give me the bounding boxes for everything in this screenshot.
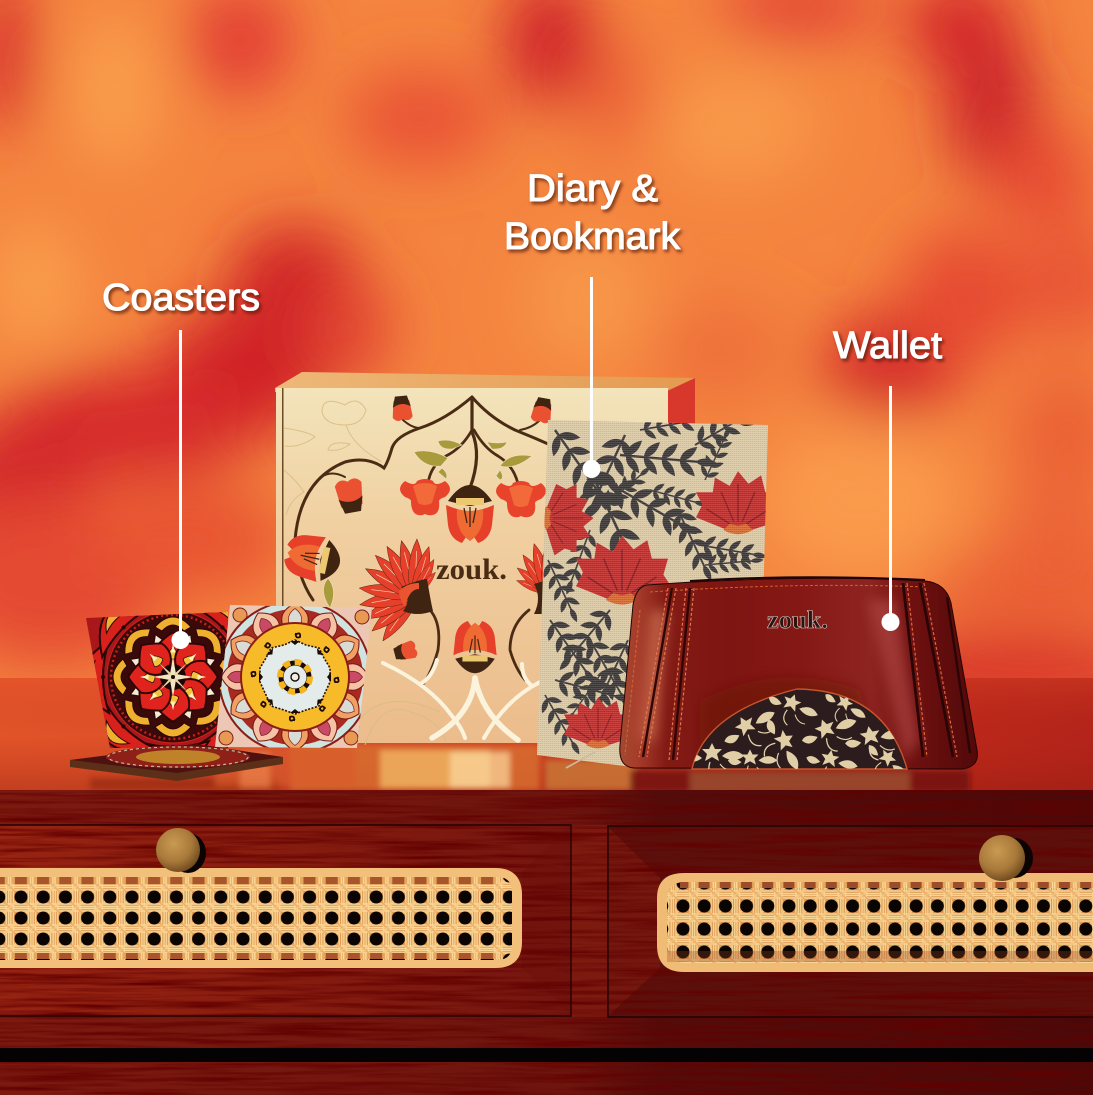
leader line and dot: Diary bbox=[582, 277, 600, 478]
coaster corner motifs bbox=[219, 608, 369, 745]
label: Diary & Bookmark: Diary & bbox=[527, 168, 658, 210]
right drawer knob bbox=[979, 835, 1033, 881]
zipper pull bbox=[566, 752, 595, 768]
faint botanical print bbox=[284, 401, 560, 745]
gift box bbox=[275, 372, 695, 745]
top right blossom bbox=[496, 481, 546, 517]
leaf sprigs on cover bbox=[542, 422, 764, 754]
large spray flower bbox=[359, 539, 439, 645]
callout: Coasters bbox=[102, 277, 260, 649]
wallet: red leather with floral panel bbox=[620, 577, 977, 791]
olive leaves bbox=[323, 440, 532, 608]
box inner crease bbox=[282, 388, 284, 628]
red flower, bottom bbox=[564, 698, 622, 748]
wallet seams bbox=[625, 583, 970, 760]
red flower, centre bbox=[576, 536, 673, 605]
left drawer knob bbox=[156, 828, 206, 873]
cabinet top rail bbox=[0, 790, 1093, 826]
cabinet base bbox=[0, 1062, 1093, 1095]
label: Diary & Bookmark: Bookmark bbox=[504, 216, 681, 258]
arch stems bbox=[295, 397, 555, 684]
right cane panel bbox=[657, 873, 1093, 972]
red flower, right bbox=[696, 471, 766, 534]
cabinet right drawer bbox=[607, 826, 1093, 1017]
top left blossom bbox=[400, 479, 450, 515]
coaster: lying flat bbox=[70, 744, 283, 781]
lower centre tulip bbox=[453, 621, 497, 673]
right spray flower bbox=[514, 536, 557, 614]
leader line and dot: Wallet bbox=[882, 386, 900, 631]
callout: Wallet bbox=[833, 325, 942, 631]
wallet zip edge bbox=[690, 577, 925, 581]
left cane panel bbox=[0, 868, 522, 968]
gold-white lower stems bbox=[383, 660, 540, 740]
cabinet left drawer bbox=[0, 825, 571, 1017]
tiny bud bbox=[392, 640, 418, 663]
diary with floral jute cover bbox=[537, 420, 768, 769]
label: Diary & Bookmark bbox=[504, 168, 681, 258]
callout: Diary and Bookmark bbox=[504, 168, 681, 478]
wallet logo: zouk. bbox=[767, 607, 828, 634]
table top: glossy reflective surface bbox=[0, 678, 1093, 793]
box logo: zouk. bbox=[436, 553, 507, 586]
box right side bbox=[665, 378, 695, 430]
label: Coasters: Coasters bbox=[102, 277, 260, 319]
coaster: red mandala, standing bbox=[86, 612, 228, 748]
cabinet lower rail bbox=[0, 1017, 1093, 1049]
centre hanging tulip bbox=[446, 485, 494, 543]
small buds along arch bbox=[391, 395, 413, 421]
wallet floral panel bbox=[692, 689, 907, 769]
drawer seam lines bbox=[0, 825, 1093, 1017]
background: orange and red blurred backdrop bbox=[0, 0, 1093, 704]
box top face bbox=[275, 372, 695, 392]
wallet top stitching bbox=[650, 585, 925, 592]
left drawer mitred corner bbox=[522, 826, 570, 1012]
leader line and dot: Coasters bbox=[172, 330, 190, 649]
left side tulip bbox=[281, 530, 344, 586]
red flower, left edge bbox=[543, 484, 594, 555]
label: Wallet: Wallet bbox=[833, 325, 942, 367]
cabinet: dark red wooden sideboard bbox=[0, 790, 1093, 1095]
left bud bbox=[334, 477, 366, 515]
right drawer mitred corner bbox=[608, 827, 660, 1016]
box front bbox=[276, 388, 668, 743]
wallet leather highlights bbox=[640, 600, 920, 760]
coaster: yellow mandala, standing bbox=[215, 601, 372, 753]
cabinet shadow gap bbox=[0, 1048, 1093, 1062]
wood grain overlay bbox=[0, 790, 1093, 1095]
cabinet centre stile bbox=[571, 825, 607, 1017]
